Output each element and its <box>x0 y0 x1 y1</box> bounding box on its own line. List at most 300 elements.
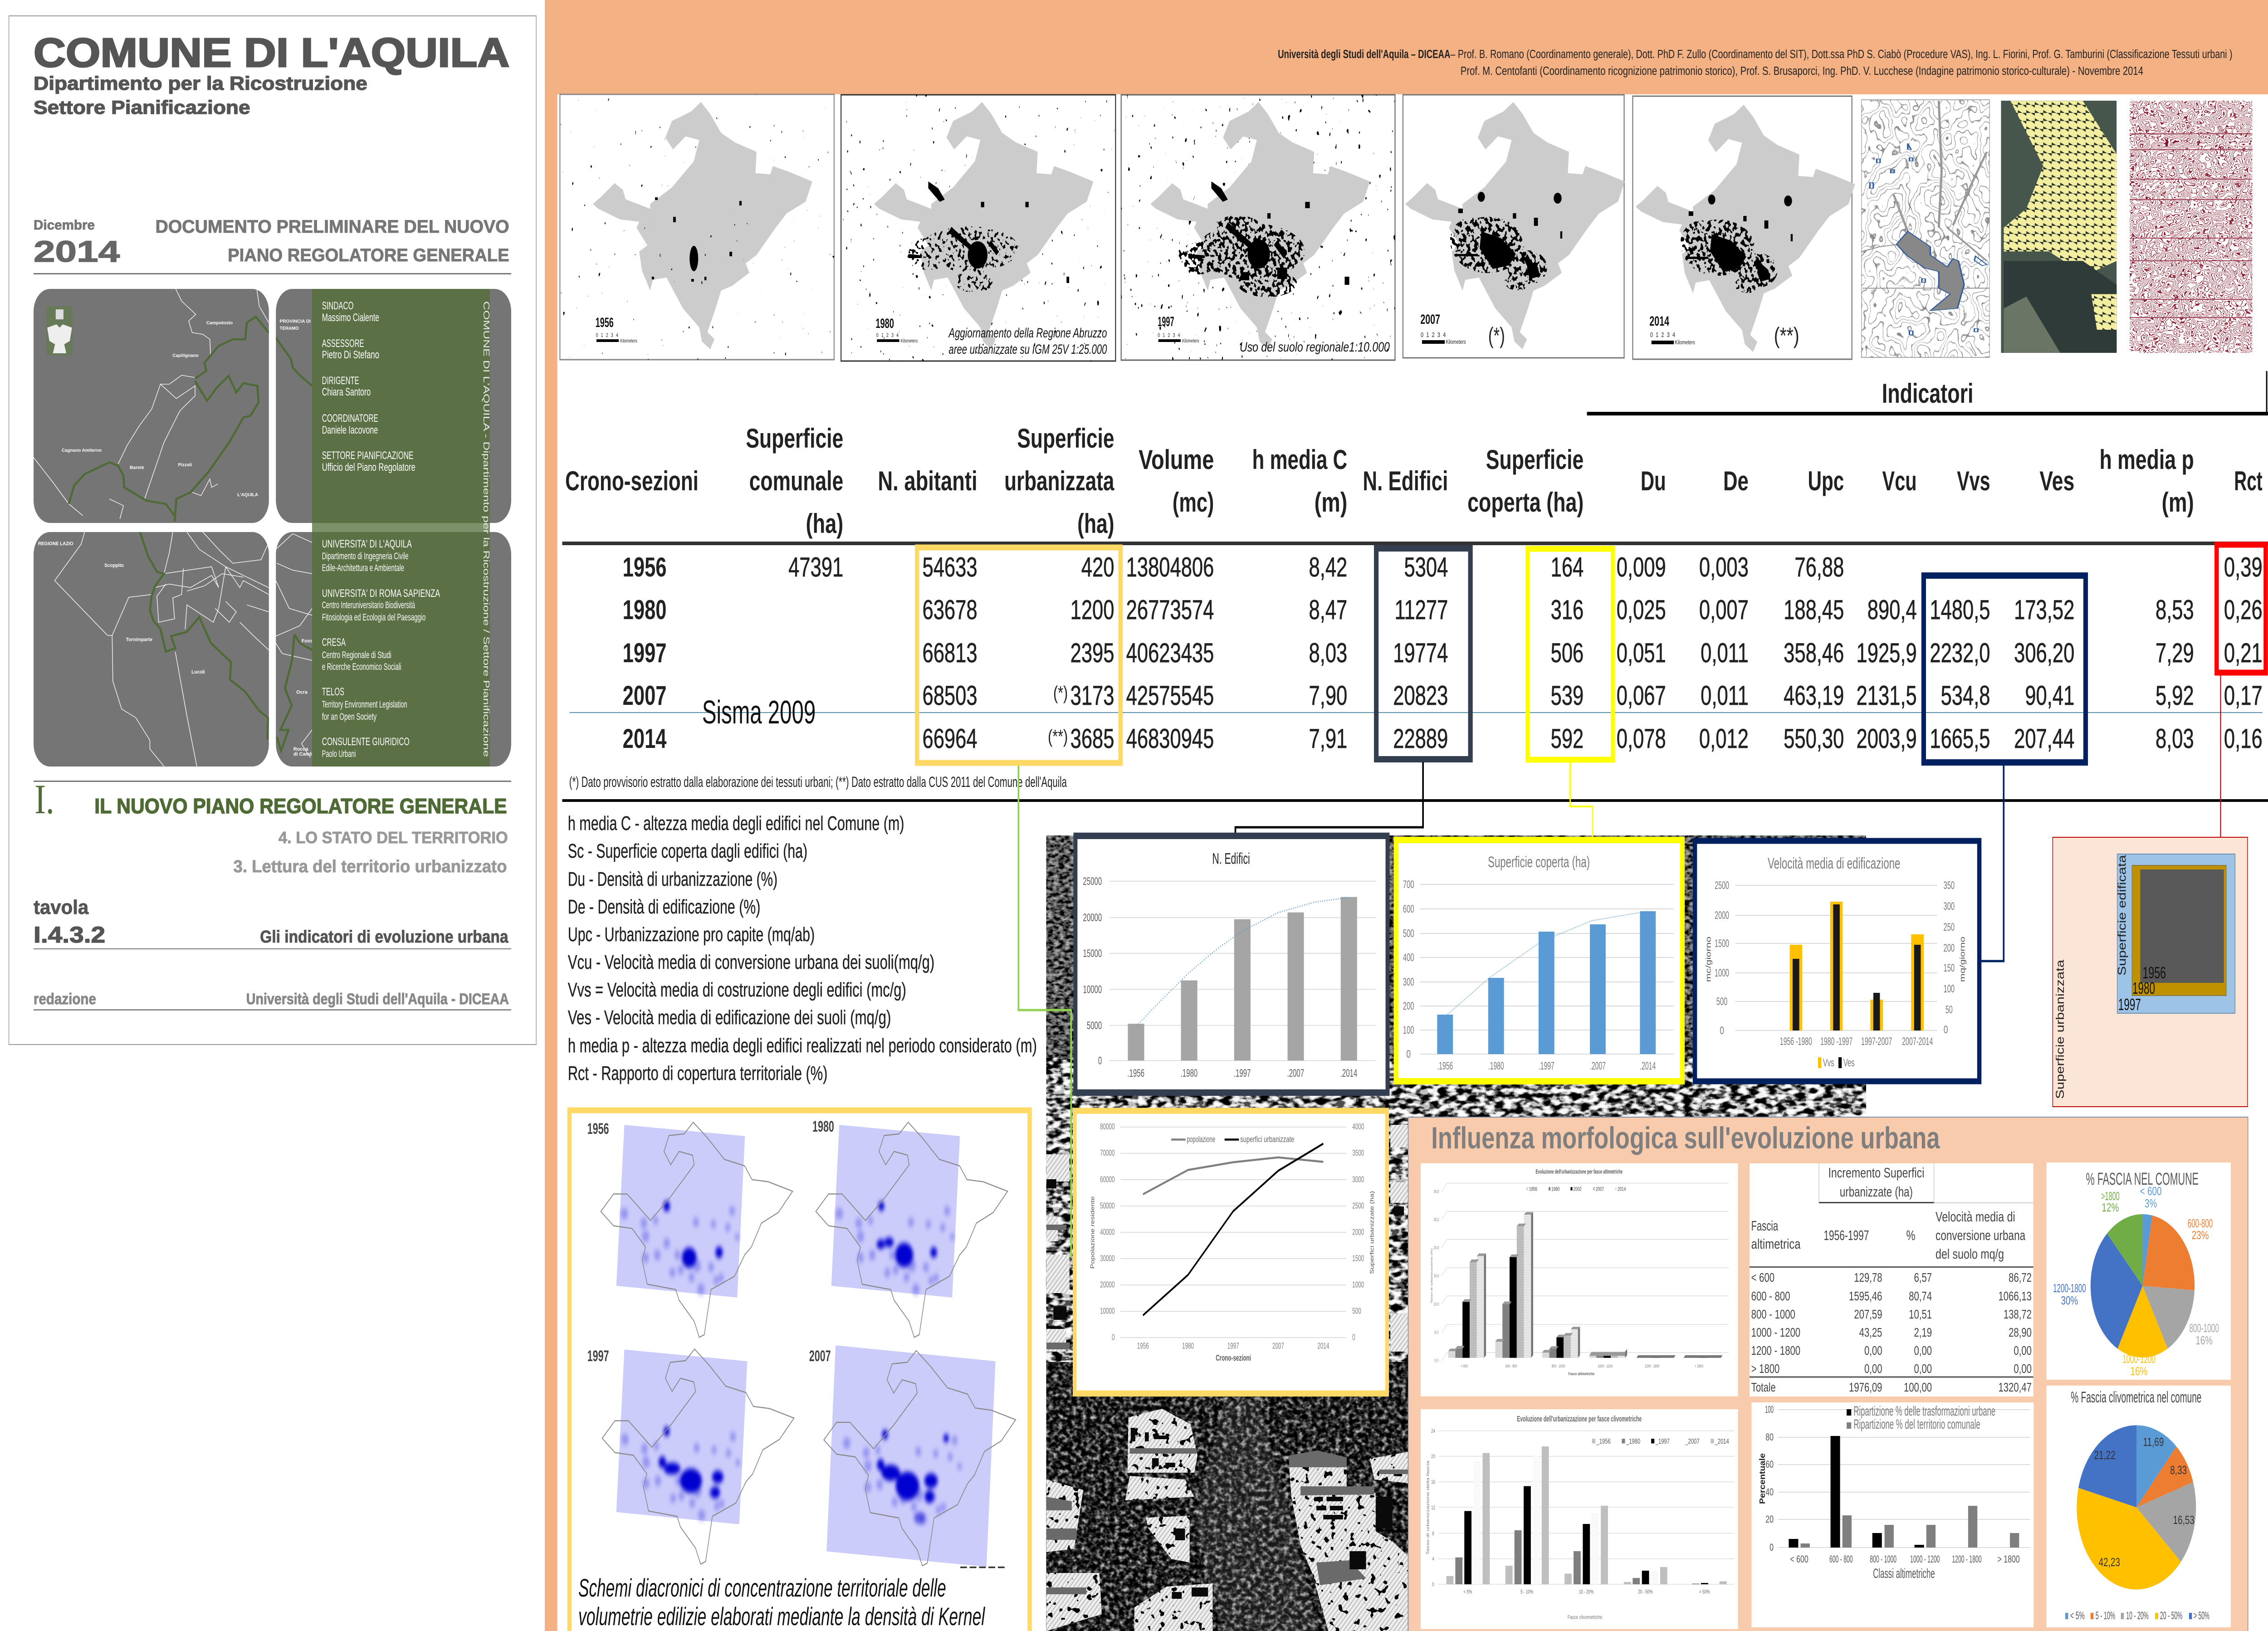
table header row: Rct <box>2234 466 2263 497</box>
chart: urbanizzazione per fasce clivometriche: < 5% <box>1463 1589 1472 1595</box>
pie chart: % fascia nel comune: 1200-1800 <box>2053 1281 2086 1295</box>
column: de: 0,012 <box>1699 724 1749 754</box>
table header row: Du <box>1641 466 1666 497</box>
table header row: Upc <box>1808 466 1844 497</box>
legend: indicator definitions: De - Densità di edificazione (%) <box>568 896 760 918</box>
legend: indicator definitions: Ves - Velocità media di edificazione dei suoli (mq/g) <box>568 1006 891 1029</box>
table: incremento superfici urbanizzate: 2,19 <box>1914 1326 1932 1340</box>
chart: urbanizzazione per fasce altimetriche <box>1421 1163 1738 1397</box>
column: ves: 207,44 <box>2014 724 2074 754</box>
chart: superficie coperta: .2014 <box>1640 1060 1656 1072</box>
map 1980: Kilometers <box>900 338 918 344</box>
pie chart: % fascia clivometrica: 5 - 10% <box>2096 1610 2115 1622</box>
map panel: bottom left: Scoppito <box>104 563 124 568</box>
chart: n. edifici: 0 <box>1098 1055 1102 1067</box>
pie chart: % fascia clivometrica: 21,22 <box>2094 1448 2116 1462</box>
table header row: coperta (ha) <box>1467 488 1584 518</box>
pie chart: % fascia nel comune: < 600 <box>2140 1184 2162 1198</box>
chart: urbanizzazione per fasce altimetriche: 10,0 <box>1434 1302 1439 1307</box>
panel: morphological influence <box>1408 1117 2248 1631</box>
chart: urbanizzazione per fasce clivometriche: 10 - 20% <box>1579 1589 1593 1595</box>
diagram: rapporto di copertura territoriale: 1980 <box>2132 979 2155 997</box>
connector: superficie coperta box to bar chart <box>1570 762 1593 844</box>
column: crono-sezioni: 2007 <box>623 681 667 711</box>
pie chart: % fascia nel comune: 16% <box>2131 1364 2147 1378</box>
chart: ripartizione per classi altimetriche: 60 <box>1765 1460 1774 1470</box>
subsection subtitle: 3. Lettura del territorio urbanizzato <box>234 857 507 876</box>
chart: velocita media di edificazione: 300 <box>1943 900 1955 913</box>
table: incremento superfici urbanizzate: 80,74 <box>1909 1289 1932 1304</box>
chart: superficie coperta: 500 <box>1403 928 1414 940</box>
chart: population and urbanised surface: 1956 <box>1137 1342 1149 1351</box>
chart: urbanizzazione per fasce clivometriche: 4 <box>1432 1557 1434 1563</box>
diagram: rapporto di copertura territoriale <box>2053 837 2248 1107</box>
green credits column: DIRIGENTE <box>322 375 359 387</box>
chart: urbanizzazione per fasce altimetriche: Fasce altimetriche <box>1569 1372 1595 1376</box>
chart: velocita media di edificazione: 2000 <box>1715 909 1729 922</box>
column: h media p <box>2156 595 2194 754</box>
column: upc: 76,88 <box>1794 552 1844 583</box>
map 2007: (*) <box>1488 323 1505 348</box>
table: incremento superfici urbanizzate: Totale <box>1751 1381 1776 1395</box>
chart: n. edifici: .2014 <box>1340 1068 1357 1079</box>
green credits column: Daniele Iacovone <box>322 424 378 436</box>
table header row: h media p <box>2099 445 2194 475</box>
chart: superficie coperta: 400 <box>1403 952 1414 964</box>
kernel map 1980 <box>816 1122 1007 1338</box>
chart: population and urbanised surface: 4000 <box>1352 1123 1364 1132</box>
redazione label: redazione <box>34 991 96 1008</box>
column: crono-sezioni <box>623 552 667 754</box>
table: incremento superfici urbanizzate: 43,25 <box>1859 1326 1882 1340</box>
column: n. edifici: 11277 <box>1394 595 1448 625</box>
map 2007: Kilometers <box>1446 339 1466 345</box>
chart: velocita media di edificazione: 250 <box>1943 921 1955 933</box>
chart: population and urbanised surface: Superfici urbanizzate (ha) <box>1369 1191 1375 1274</box>
chart: velocita media di edificazione: 2500 <box>1715 879 1729 892</box>
table: incremento superfici urbanizzate: Incremento Superfici <box>1828 1164 1924 1181</box>
chart: urbanizzazione per fasce altimetriche: 2014 <box>1618 1187 1626 1192</box>
pie chart: % fascia clivometrica: < 5% <box>2070 1610 2085 1622</box>
column: n. abitanti: 66964 <box>923 724 978 754</box>
chart: population and urbanised surface: Popolazione residente <box>1090 1196 1096 1269</box>
column: vcu: 890,4 <box>1867 595 1917 625</box>
pie chart: % fascia nel comune: 30% <box>2061 1294 2078 1307</box>
column: superficie comunale: 47391 <box>788 552 843 583</box>
column: crono-sezioni: 1997 <box>623 638 667 669</box>
panel: kernel density maps: 1997 <box>587 1348 609 1365</box>
map 2007 <box>1403 95 1625 358</box>
map 1956 <box>560 94 834 360</box>
table header row: Vcu <box>1882 466 1917 497</box>
header credits <box>1278 47 2233 78</box>
legend: indicator definitions: Vvs = Velocità media di costruzione degli edifici (mc/g) <box>568 979 906 1001</box>
column: h media c: 8,42 <box>1309 552 1347 583</box>
map 1997: Kilometers <box>1182 338 1199 344</box>
chart: velocita media di edificazione: 0 <box>1944 1024 1948 1036</box>
panel: kernel density maps: volumetrie edilizie elaborati mediante la densità di Kernel <box>578 1603 985 1631</box>
green credits column: CONSULENTE GIURIDICO <box>322 736 410 748</box>
column: h media c: 8,47 <box>1309 595 1347 625</box>
legend: indicator definitions: Rct - Rapporto di copertura territoriale (%) <box>568 1062 827 1084</box>
table: incremento superfici urbanizzate: 1200 - 1800 <box>1751 1344 1800 1358</box>
green credits column: UNIVERSITA' DI ROMA SAPIENZA <box>322 587 440 600</box>
chart: velocita media di edificazione: 2007-2014 <box>1902 1035 1933 1048</box>
map 1997 <box>1121 95 1395 360</box>
map 1980 <box>841 95 1115 361</box>
map panel: top left: Campotosto <box>206 320 233 326</box>
green credits column: Fitosiologia ed Ecologia del Paesaggio <box>322 612 425 623</box>
column: superficie urbanizzata: (**) <box>1048 726 1068 747</box>
chart: urbanizzazione per fasce altimetriche: 1200 - 1800 <box>1645 1364 1659 1368</box>
chart: population and urbanised surface: 3000 <box>1352 1175 1364 1184</box>
chart: ripartizione per classi altimetriche: 0 <box>1769 1543 1774 1553</box>
column: n. abitanti: 66813 <box>923 638 978 669</box>
chart: velocita media di edificazione: 50 <box>1945 1004 1953 1016</box>
chart: population and urbanised surface: 0 <box>1112 1333 1115 1342</box>
pie chart: % fascia nel comune: 16% <box>2195 1333 2213 1347</box>
chart: urbanizzazione per fasce clivometriche: 8 <box>1432 1531 1434 1537</box>
green credits column: SETTORE PIANIFICAZIONE <box>322 449 413 462</box>
chart: superficie coperta: 600 <box>1403 903 1414 915</box>
chart: n. edifici: 20000 <box>1083 912 1102 924</box>
chart: velocita media di edificazione: Vvs <box>1823 1057 1834 1069</box>
column: crono-sezioni: 2014 <box>623 724 667 754</box>
column: upc: 188,45 <box>1784 595 1844 625</box>
column: h media c: 7,91 <box>1309 724 1347 754</box>
image: historic topographic map <box>1862 100 1989 357</box>
chart: superficie coperta: .1997 <box>1539 1060 1554 1072</box>
column: vvs <box>1930 595 1990 754</box>
chart: population and urbanised surface: 40000 <box>1100 1228 1115 1237</box>
legend: indicator definitions: Vcu - Velocità media di conversione urbana dei suoli(mq/g) <box>568 951 934 973</box>
table: incremento superfici urbanizzate: conversione urbana <box>1936 1227 2026 1243</box>
column: vvs: 1480,5 <box>1930 595 1990 625</box>
chart: n. edifici: 5000 <box>1087 1020 1102 1032</box>
redazione name: Università degli Studi dell'Aquila - DICEAA <box>246 991 509 1008</box>
chart: urbanizzazione per fasce altimetriche: 15,0 <box>1434 1274 1439 1279</box>
document title line 2: PIANO REGOLATORE GENERALE <box>228 245 509 265</box>
table: incremento superfici urbanizzate: 1595,46 <box>1849 1289 1882 1304</box>
chart: n. edifici: 15000 <box>1083 947 1102 960</box>
table header row: Vvs <box>1957 466 1990 497</box>
chart: population and urbanised surface: 1997 <box>1227 1342 1239 1351</box>
orange header band and left strip <box>545 0 2268 1631</box>
pie chart: % fascia nel comune: 23% <box>2192 1228 2209 1242</box>
connector: velocity box to chart <box>1981 766 2004 961</box>
diagram: rapporto di copertura territoriale: Superficie edificata <box>2116 855 2128 976</box>
column: superficie coperta <box>1551 552 1584 754</box>
legend: indicator definitions: Upc - Urbanizzazione pro capite (mq/ab) <box>568 923 815 946</box>
pie chart: % fascia nel comune: 800-1000 <box>2190 1321 2219 1335</box>
column: h media c: 7,90 <box>1309 681 1347 711</box>
kernel map 2007 <box>824 1345 1016 1567</box>
chart: urbanizzazione per fasce clivometriche: 12 <box>1431 1505 1435 1511</box>
chart: velocita media di edificazione: 1956 -1980 <box>1780 1035 1812 1048</box>
chart: urbanizzazione per fasce clivometriche: Evoluzione dell'urbanizzazione per fasce clivometriche <box>1517 1415 1642 1424</box>
legend: indicator definitions: h media p - altezza media degli edifici realizzati nel periodo considerato (m) <box>568 1035 1037 1057</box>
highlight box: n. edifici <box>1376 548 1471 759</box>
map panel: bottom right: Fossa <box>302 638 316 644</box>
pie chart: % fascia clivometrica: % Fascia clivometrica nel comune <box>2071 1389 2201 1406</box>
green credits column: TELOS <box>322 686 344 698</box>
column: volume: 26773574 <box>1126 595 1214 625</box>
legend: indicator definitions <box>568 812 1037 1084</box>
table: incremento superfici urbanizzate: 129,78 <box>1854 1271 1882 1285</box>
column: rct: 0,21 <box>2224 638 2263 669</box>
chart: velocita media di edificazione: 1000 <box>1715 967 1729 979</box>
table: incremento superfici urbanizzate: altimetrica <box>1751 1235 1801 1252</box>
column: vcu <box>1857 595 1917 754</box>
column: de: 0,011 <box>1701 681 1749 711</box>
column: vvs: 2232,0 <box>1930 638 1990 669</box>
table: incremento superfici urbanizzate: 0,00 <box>2014 1344 2032 1358</box>
table: incremento superfici urbanizzate: 6,57 <box>1914 1271 1932 1285</box>
map 1956: 1956 <box>596 315 614 330</box>
column: h media c <box>1309 552 1347 754</box>
chart: superficie coperta: Superficie coperta (ha) <box>1488 854 1590 871</box>
column: de <box>1699 552 1749 754</box>
table: incremento superfici urbanizzate: Fascia <box>1751 1217 1779 1234</box>
column: volume: 40623435 <box>1126 638 1214 669</box>
panel: kernel density maps: 1956 <box>587 1120 609 1138</box>
pie chart: % fascia clivometrica <box>2047 1386 2231 1627</box>
chart: urbanizzazione per fasce altimetriche: Tasso di urbanizzazione (%) <box>1431 1249 1433 1304</box>
green credits column: Pietro Di Stefano <box>322 349 379 361</box>
chart: ripartizione per classi altimetriche: < 600 <box>1790 1554 1809 1565</box>
table header row: Ves <box>2039 466 2074 497</box>
chart: ripartizione per classi altimetriche: Ripartizione % del territorio comunale <box>1853 1416 1980 1432</box>
chart: urbanizzazione per fasce clivometriche: _1997 <box>1655 1437 1670 1445</box>
table header row: (m) <box>1315 488 1347 518</box>
chart: ripartizione per classi altimetriche: 80 <box>1765 1432 1774 1443</box>
column: vvs: 1665,5 <box>1930 724 1990 754</box>
chart: population and urbanised surface: 2014 <box>1317 1342 1330 1351</box>
pie chart: % fascia clivometrica: > 50% <box>2194 1610 2209 1622</box>
column: volume <box>1126 552 1214 754</box>
pie chart: % fascia clivometrica: 42,23 <box>2099 1555 2120 1569</box>
column: ves: 173,52 <box>2014 595 2074 625</box>
column: de: 0,003 <box>1699 552 1749 583</box>
column: upc <box>1784 552 1844 754</box>
chart: ripartizione per classi altimetriche: 20 <box>1765 1514 1774 1525</box>
table header row: (ha) <box>806 509 843 539</box>
column: crono-sezioni: 1980 <box>623 595 667 625</box>
column: ves: 306,20 <box>2014 638 2074 669</box>
panel: kernel density maps <box>567 1107 1031 1631</box>
tavola label: tavola <box>34 896 89 918</box>
column: n. abitanti <box>923 552 978 754</box>
chart: n. edifici <box>1075 836 1388 1093</box>
subsection title: 4. LO STATO DEL TERRITORIO <box>279 829 508 847</box>
chart: velocita media di edificazione: 350 <box>1943 879 1955 892</box>
green credits column: ASSESSORE <box>322 337 364 350</box>
chart: ripartizione per classi altimetriche: 600 - 800 <box>1829 1554 1853 1565</box>
chart: superficie coperta: 0 <box>1406 1048 1411 1060</box>
date: month: Dicembre <box>34 217 95 233</box>
chart: n. edifici: 25000 <box>1083 875 1102 888</box>
header credits: Università degli Studi dell'Aquila – DICEAA <box>1278 47 1450 61</box>
chart: ripartizione per classi altimetriche: 800 - 1000 <box>1870 1554 1897 1565</box>
table: incremento superfici urbanizzate: 1976,09 <box>1849 1381 1882 1395</box>
map panel: bottom right: di Cambio <box>293 752 318 757</box>
chart: n. edifici: .2007 <box>1287 1068 1304 1079</box>
highlight box: rct <box>2217 545 2266 673</box>
chart: population and urbanised surface: 1980 <box>1182 1342 1194 1351</box>
chart: urbanizzazione per fasce altimetriche: 2002 <box>1574 1187 1582 1192</box>
column: h media p: 5,92 <box>2156 681 2194 711</box>
heading: comune: COMUNE DI L'AQUILA <box>34 30 509 75</box>
map 2014: (**) <box>1774 323 1799 348</box>
chart: ripartizione per classi altimetriche: 40 <box>1765 1487 1774 1498</box>
chart: population and urbanised surface: 500 <box>1352 1307 1361 1316</box>
map 1980: aree urbanizzate su IGM 25V 1:25.000 <box>948 342 1107 357</box>
chart: population and urbanised surface: 70000 <box>1100 1149 1115 1158</box>
chart: population and urbanised surface: 3500 <box>1352 1149 1364 1158</box>
chart: urbanizzazione per fasce altimetriche: 1956 <box>1529 1187 1537 1192</box>
green credits column: Ufficio del Piano Regolatore <box>322 461 415 474</box>
column: superficie urbanizzata: 1200 <box>1070 595 1114 625</box>
pie chart: % fascia clivometrica: 10 - 20% <box>2126 1610 2149 1622</box>
chart: population and urbanised surface: 1500 <box>1352 1254 1364 1263</box>
chart: velocita media di edificazione: 200 <box>1943 942 1955 954</box>
pie chart: % fascia clivometrica: 20 - 50% <box>2160 1610 2182 1622</box>
table: incremento superfici urbanizzate: 600 - 800 <box>1751 1289 1790 1304</box>
table: indicators <box>562 371 2268 802</box>
column: h media p: 7,29 <box>2156 638 2194 669</box>
label: sisma 2009: Sisma 2009 <box>702 694 816 731</box>
highlight box: superficie coperta <box>1528 549 1613 760</box>
chart: n. edifici: N. Edifici <box>1212 850 1250 867</box>
chart: superficie coperta: 700 <box>1403 879 1414 891</box>
map 2014: 0 1 2 3 4 <box>1650 331 1675 338</box>
chart: ripartizione per classi altimetriche <box>1751 1402 2033 1627</box>
green credits column: Chiara Santoro <box>322 386 371 398</box>
table header row: De <box>1723 466 1749 497</box>
chart: superficie coperta: .1956 <box>1437 1060 1453 1072</box>
map panel: bottom left <box>34 532 269 767</box>
map panel: bottom right <box>276 532 511 767</box>
heading: dipartimento: Dipartimento per la Ricostruzione <box>34 73 367 94</box>
chart: n. edifici: .1997 <box>1234 1068 1251 1079</box>
chart: velocita media di edificazione: mc/giorno <box>1705 937 1713 982</box>
column: volume: 13804806 <box>1126 552 1214 583</box>
table: incremento superfici urbanizzate: 0,00 <box>1914 1362 1932 1376</box>
table: incremento superfici urbanizzate: 86,72 <box>2009 1271 2032 1285</box>
chart: urbanizzazione per fasce altimetriche: 20,0 <box>1434 1245 1439 1250</box>
table header row: (mc) <box>1173 488 1214 518</box>
column: vcu: 2131,5 <box>1857 681 1917 711</box>
chart: population and urbanised surface: 2500 <box>1352 1201 1364 1211</box>
table: incremento superfici urbanizzate: urbanizzate (ha) <box>1840 1183 1913 1200</box>
map 1980: 1980 <box>875 316 894 331</box>
table: incremento superfici urbanizzate: > 1800 <box>1751 1362 1779 1376</box>
kernel caption: Schemi diacronici di concentrazione territoriale delle <box>578 1574 946 1602</box>
kernel map 1997 <box>602 1349 794 1564</box>
chart: urbanizzazione per fasce clivometriche: _1980 <box>1626 1437 1640 1445</box>
chart: population and urbanised surface: Crono-sezioni <box>1216 1353 1251 1363</box>
pie chart: % fascia clivometrica: 11,69 <box>2143 1435 2164 1449</box>
green credits column: COMUNE DI L'AQUILA - Dipartimento per la Ricostruzione / Settore Pianificazione <box>482 301 491 757</box>
table: incremento superfici urbanizzate: 207,59 <box>1854 1308 1882 1322</box>
chart: urbanizzazione per fasce altimetriche: 25,0 <box>1434 1217 1439 1222</box>
chart: n. edifici: .1980 <box>1181 1068 1198 1079</box>
map panel: bottom left: REGIONE LAZIO <box>38 541 73 547</box>
legend: indicator definitions: Sc - Superficie coperta dagli edifici (ha) <box>568 840 807 862</box>
pie chart: % fascia clivometrica: 8,33 <box>2170 1463 2187 1477</box>
chart: population and urbanised surface <box>1075 1111 1387 1393</box>
map panel: top right: PROVINCIA DI <box>280 319 311 324</box>
section title: IL NUOVO PIANO REGOLATORE GENERALE <box>94 795 507 818</box>
chart: population and urbanised surface: 20000 <box>1100 1280 1115 1289</box>
map panel: top right: TERAMO <box>280 326 299 331</box>
table: incremento superfici urbanizzate: 1956-1997 <box>1823 1227 1869 1243</box>
table header row: Superficie <box>746 424 843 454</box>
header credits: – Prof. B. Romano (Coordinamento generale), Dott. PhD F. Zullo (Coordinamento del SIT), Dott.ssa PhD S. Ciabò (Procedure VAS), Ing. L. Fiorini, Prof. G. Tamburini (Classificazione Tessuti urbani ) <box>1450 47 2233 61</box>
map 1980: Aggiornamento della Regione Abruzzo <box>948 325 1107 341</box>
column: superficie urbanizzata: 2395 <box>1070 638 1114 669</box>
chart: urbanizzazione per fasce clivometriche: 0 <box>1432 1582 1434 1588</box>
panel: cover sheet <box>9 16 536 1045</box>
table footnote: (*) Dato provvisorio estratto dalla elaborazione dei tessuti urbani; (**) Dato estratto dalla CUS 2011 del Comune dell'Aquila <box>569 774 1067 790</box>
column: n. edifici: 22889 <box>1393 724 1448 754</box>
map panel: bottom left: Tornimparte <box>126 637 152 642</box>
chart: population and urbanised surface: popolazione <box>1187 1135 1215 1144</box>
column: rct <box>2224 552 2263 754</box>
chart: velocita media di edificazione: Velocità media di edificazione <box>1768 855 1900 872</box>
table header row: Superficie <box>1486 445 1584 475</box>
column: vcu: 1925,9 <box>1857 638 1917 669</box>
table header row: urbanizzata <box>1004 466 1114 497</box>
column: du: 0,025 <box>1617 595 1666 625</box>
map panel: bottom right: Ocra <box>296 690 308 695</box>
green credits column: e Ricerche Economico Sociali <box>322 661 401 672</box>
green credits column: Edile-Architettura e Ambientale <box>322 562 404 573</box>
chart: urbanizzazione per fasce altimetriche: > 1800 <box>1695 1364 1703 1368</box>
chart: population and urbanised surface: 2007 <box>1272 1342 1284 1351</box>
diagram: rapporto di copertura territoriale: Superficie urbanizzata <box>2054 959 2067 1099</box>
map panel: top left: Cagnano Amiterno <box>62 448 102 453</box>
column: rct: 0,26 <box>2224 595 2263 625</box>
table: incremento superfici urbanizzate: 138,72 <box>2004 1308 2032 1322</box>
header credits: Prof. M. Centofanti (Coordinamento ricognizione patrimonio storico), Prof. S. Brusaporci, Ing. PhD. V. Lucchese (Indagine patrimonio storico-culturale) - Novembre 2014 <box>1461 64 2143 78</box>
connector: rct box to diagram <box>2220 675 2221 837</box>
table: incremento superfici urbanizzate: 1066,13 <box>1999 1289 2032 1304</box>
column: superficie urbanizzata: 420 <box>1081 552 1114 583</box>
table: incremento superfici urbanizzate: 1000 - 1200 <box>1751 1326 1800 1340</box>
map 1997: 1997 <box>1158 314 1174 329</box>
column: du: 0,078 <box>1617 724 1666 754</box>
column: superficie urbanizzata: 3685 <box>1070 724 1114 754</box>
pie chart: % fascia nel comune: 3% <box>2145 1196 2157 1210</box>
chart: population and urbanised surface: 50000 <box>1100 1201 1115 1211</box>
table: incremento superfici urbanizzate: 0,00 <box>1864 1362 1882 1376</box>
green credits column: UNIVERSITA' DI L'AQUILA <box>322 538 412 550</box>
table: incremento superfici urbanizzate: 800 - 1000 <box>1751 1308 1795 1322</box>
chart: superficie coperta: 100 <box>1403 1024 1414 1036</box>
column: n. abitanti: 68503 <box>923 681 978 711</box>
legend: indicator definitions: h media C - altezza media degli edifici nel Comune (m) <box>568 812 904 835</box>
chart: population and urbanised surface: superfici urbanizzate <box>1240 1135 1295 1144</box>
image: aerial photo with buildings <box>2001 101 2116 353</box>
table: incremento superfici urbanizzate <box>1750 1163 2033 1397</box>
chart: velocita media di edificazione: 100 <box>1943 983 1955 995</box>
map panel: bottom right: Rocca <box>293 747 309 752</box>
column: n. edifici: 19774 <box>1393 638 1448 669</box>
map panel: top right <box>276 289 511 523</box>
chart: velocita media di edificazione: 150 <box>1943 962 1955 974</box>
panel: kernel density maps: 1980 <box>812 1118 834 1135</box>
